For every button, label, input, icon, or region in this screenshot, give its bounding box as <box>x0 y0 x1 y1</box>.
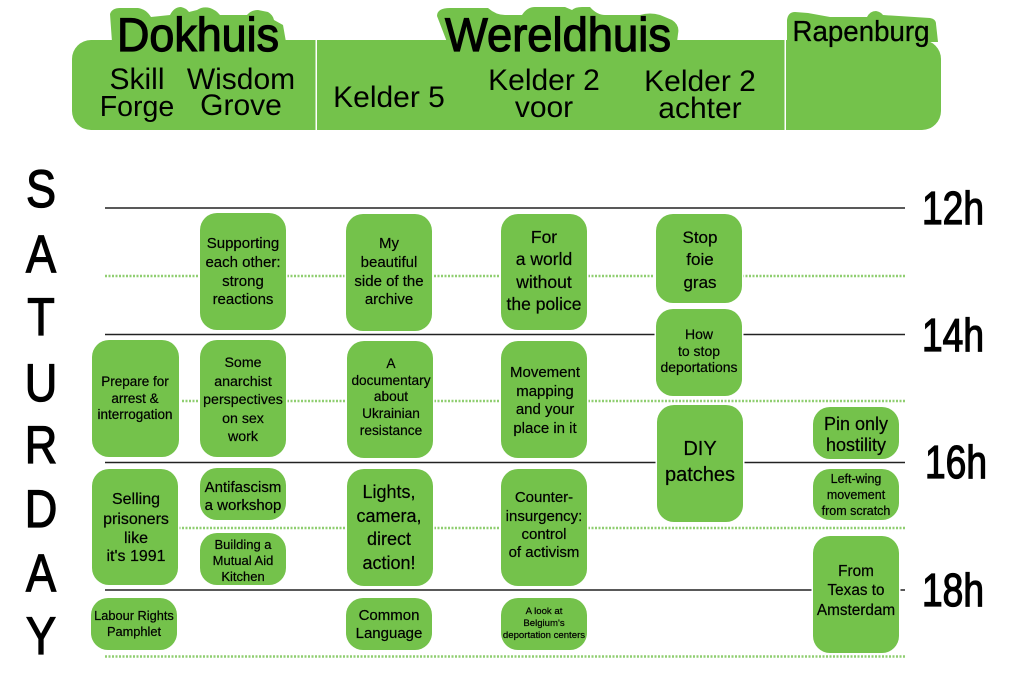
session: A look at Belgium's deportation centers <box>501 598 587 650</box>
session: My beautiful side: side of the <box>354 273 424 290</box>
session: Prepare for arrest: arrest & <box>111 391 159 406</box>
session: Lights, camera, direct action <box>347 469 433 586</box>
heading: Dokhuis: Dokhuis <box>117 8 279 61</box>
session: For a world without the police: the police <box>507 294 581 314</box>
session: Movement mapping: place in it <box>513 420 578 437</box>
session: Supporting each other: each other: <box>205 254 281 271</box>
session: My beautiful side: beautiful <box>361 254 417 271</box>
session: For a world without the police <box>501 214 587 330</box>
session: DIY patches: DIY <box>683 438 717 460</box>
session: Lights, camera, direct action: direct <box>367 529 411 549</box>
time: 14h: 14h <box>922 309 984 361</box>
session: Some anarchist perspectives <box>200 340 286 457</box>
day label: Saturday: S <box>26 160 56 219</box>
session: Supporting each other: reactions <box>213 291 273 308</box>
session: Prepare for arrest: Prepare for <box>101 374 169 389</box>
session: Left-wing movement: movement <box>827 488 886 502</box>
room: Kelder 2 voor: voor <box>515 91 573 124</box>
time grid lines <box>105 208 905 656</box>
room: Kelder 2 achter: Kelder 2 <box>644 65 756 98</box>
session: Counter-insurgency: of activism <box>509 544 579 561</box>
session: A documentary: A <box>386 356 396 371</box>
session: Movement mapping: mapping <box>516 383 574 400</box>
time: 16h: 16h <box>925 436 987 488</box>
session: Labour Rights Pamphlet: Labour Rights <box>94 608 174 623</box>
session: Selling prisoners: like <box>124 530 148 547</box>
session: Some anarchist perspectives: perspectives <box>203 392 283 408</box>
room: Wisdom Grove: Wisdom <box>187 63 295 96</box>
session: Some anarchist perspectives: work <box>227 429 259 445</box>
session: Antifascism workshop: Antifascism <box>205 479 281 496</box>
session: Selling prisoners: Selling <box>112 491 160 508</box>
session: Movement mapping <box>501 341 587 458</box>
session: My beautiful side: My <box>379 235 399 252</box>
session: A documentary: resistance <box>360 423 422 438</box>
session: Common Language: Common <box>359 607 419 624</box>
session: How to stop deportations: How <box>685 326 714 342</box>
day label: Saturday: D <box>25 480 57 539</box>
session: Some anarchist perspectives: on sex <box>222 411 264 427</box>
session: From Texas to Amsterdam: From <box>838 563 874 580</box>
header band <box>72 40 941 130</box>
room: Kelder 2 voor: Kelder 2 <box>488 64 600 97</box>
day label: Saturday: A <box>26 225 56 284</box>
session: A documentary <box>347 341 433 458</box>
session: Stop foie gras: gras <box>683 273 717 292</box>
session: Lights, camera, direct action: action! <box>362 553 416 573</box>
session: Counter-insurgency <box>501 469 587 586</box>
session: Pin only hostility: hostility <box>826 435 886 455</box>
session: From Texas to Amsterdam: Texas to <box>828 582 884 599</box>
session: How to stop deportations: deportations <box>660 359 738 375</box>
session: A look at Belgium's deportation centers: A look at <box>526 606 563 617</box>
session: A look at Belgium's deportation centers: Belgium's <box>523 618 565 629</box>
session: For a world without the police: For <box>531 227 557 247</box>
session: A documentary: documentary <box>351 373 431 388</box>
session: Labour Rights Pamphlet: Pamphlet <box>107 624 161 639</box>
heading: Wereldhuis: Wereldhuis <box>445 8 671 61</box>
session: Selling prisoners: prisoners <box>103 511 169 528</box>
session: Selling prisoners: it's 1991 <box>106 548 166 565</box>
session: Pin only hostility: Pin only <box>824 414 888 434</box>
session: Stop foie gras: Stop <box>683 228 717 247</box>
day label: Saturday: R <box>25 416 57 475</box>
session: Common Language <box>346 598 432 650</box>
session: A look at Belgium's deportation centers: deportation centers <box>503 630 585 641</box>
session: Prepare for arrest: interrogation <box>97 407 173 422</box>
room: Kelder 5: Kelder 5 <box>333 81 445 114</box>
session: For a world without the police: a world <box>516 249 572 269</box>
day label: Saturday: U <box>25 354 57 413</box>
session: For a world without the police: without <box>515 272 572 292</box>
heading: Rapenburg: Rapenburg <box>792 16 930 48</box>
session: From Texas to Amsterdam: Amsterdam <box>817 602 895 619</box>
session: Selling prisoners <box>92 469 178 585</box>
session: Supporting each other: Supporting <box>207 235 279 252</box>
session: DIY patches <box>657 405 743 522</box>
session: Counter-insurgency: control <box>521 526 567 543</box>
session: Building a Mutual Aid Kitchen: Kitchen <box>221 569 265 584</box>
session: Counter-insurgency: insurgency: <box>506 508 582 525</box>
session: Some anarchist perspectives: anarchist <box>214 374 272 390</box>
session: Lights, camera, direct action: camera, <box>356 506 422 526</box>
day label: Saturday: A <box>26 544 56 603</box>
day label: Saturday: T <box>27 288 55 347</box>
session: Common Language: Language <box>356 625 422 642</box>
session: How to stop deportations: to stop <box>678 343 720 359</box>
room: Kelder 2 achter: achter <box>658 92 742 125</box>
time: 18h: 18h <box>922 564 984 616</box>
session: A documentary: about <box>374 389 408 404</box>
session: My beautiful side: archive <box>365 291 413 308</box>
session: Building a Mutual Aid Kitchen: Mutual Aid <box>213 553 273 568</box>
session: From Texas to Amsterdam <box>813 536 899 653</box>
session: Movement mapping: Movement <box>510 364 581 381</box>
session: Supporting each other <box>200 213 286 330</box>
session: Some anarchist perspectives: Some <box>224 355 262 371</box>
session: Movement mapping: and your <box>516 401 574 418</box>
session: Left-wing movement <box>813 469 899 520</box>
session: Antifascism workshop <box>200 468 286 520</box>
session: Supporting each other: strong <box>222 273 264 290</box>
session: Stop foie gras <box>656 214 742 303</box>
session: How to stop deportations <box>656 309 742 396</box>
day label: Saturday <box>25 160 57 666</box>
session: Prepare for arrest <box>92 340 179 457</box>
session: Lights, camera, direct action: Lights, <box>362 482 416 502</box>
session: DIY patches: patches <box>665 464 735 486</box>
time: 12h: 12h <box>922 182 984 234</box>
session: Left-wing movement: Left-wing <box>831 472 881 486</box>
session: Stop foie gras: foie <box>686 250 714 269</box>
session: Left-wing movement: from scratch <box>822 504 890 518</box>
session: Labour Rights Pamphlet <box>91 598 177 650</box>
room: Skill Forge: Forge <box>100 91 174 123</box>
session: Counter-insurgency: Counter- <box>515 489 573 506</box>
session: Building a Mutual Aid Kitchen <box>200 533 286 585</box>
room: Wisdom Grove: Grove <box>200 89 282 122</box>
session: A documentary: Ukrainian <box>362 406 420 421</box>
room: Skill Forge: Skill <box>109 63 165 96</box>
day label: Saturday: Y <box>26 607 56 666</box>
session: Antifascism workshop: a workshop <box>205 497 281 514</box>
session: My beautiful side <box>346 214 432 331</box>
session: Pin only hostility <box>813 407 899 459</box>
session: Building a Mutual Aid Kitchen: Building a <box>214 537 272 552</box>
